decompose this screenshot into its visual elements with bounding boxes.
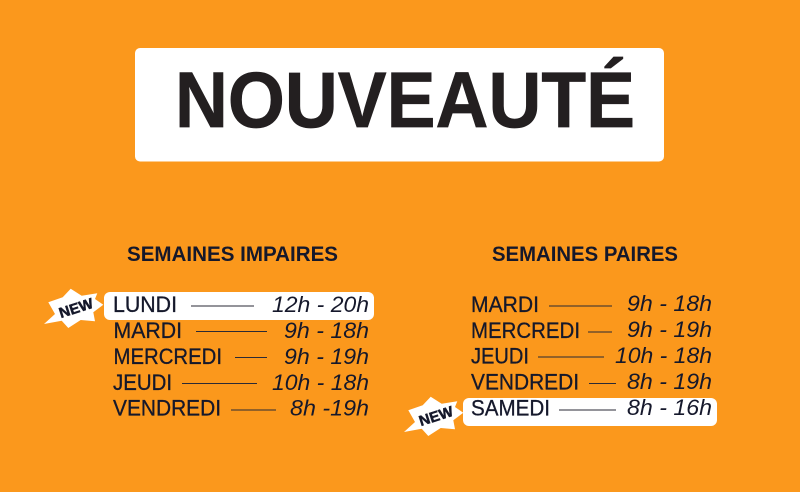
heading: semaines impaires: SEMAINES IMPAIRES [127, 242, 338, 266]
badge: new [404, 397, 463, 436]
row: jeudi: JEUDI [471, 344, 529, 368]
row: mardi: MARDI [471, 292, 539, 317]
row: mardi [114, 318, 369, 343]
row: samedi: 8h - 16h [627, 395, 712, 420]
row: mercredi: MERCREDI [471, 318, 580, 343]
row: jeudi: 10h - 18h [272, 370, 369, 395]
row: lundi: 12h - 20h [272, 292, 369, 317]
row: vendredi: 8h - 19h [627, 369, 712, 394]
row: lundi: LUNDI [113, 292, 177, 317]
highlight: lundi [104, 292, 374, 320]
row: samedi: SAMEDI [471, 396, 550, 420]
row: mercredi: MERCREDI [114, 344, 222, 369]
row: vendredi: 8h -19h [290, 396, 369, 420]
row: mardi: 9h - 18h [284, 318, 369, 343]
row: vendredi [113, 396, 369, 420]
row: samedi [471, 395, 712, 420]
row: mercredi: 9h - 19h [627, 317, 712, 342]
title banner: NOUVEAUTÉ [175, 55, 635, 144]
row: jeudi: JEUDI [113, 370, 172, 395]
row: vendredi: VENDREDI [113, 396, 221, 420]
row: mercredi [114, 344, 369, 369]
row: vendredi [471, 369, 712, 394]
row: mercredi [471, 317, 712, 343]
badge: new [44, 289, 103, 328]
panel: semaines paires [404, 242, 717, 436]
highlight: samedi [463, 398, 717, 426]
row: mardi: 9h - 18h [627, 291, 712, 316]
row: mardi: MARDI [114, 318, 182, 343]
badge: new: NEW [57, 296, 96, 322]
heading: semaines paires: SEMAINES PAIRES [492, 242, 678, 266]
row: mardi [471, 291, 712, 317]
row: vendredi: VENDREDI [471, 370, 579, 394]
badge: new: NEW [417, 404, 456, 430]
panel: semaines impaires [44, 242, 374, 420]
row: jeudi [113, 370, 369, 395]
row: jeudi: 10h - 18h [615, 343, 712, 368]
row: mercredi: 9h - 19h [284, 344, 369, 369]
row: lundi [113, 292, 369, 317]
row: jeudi [471, 343, 712, 368]
